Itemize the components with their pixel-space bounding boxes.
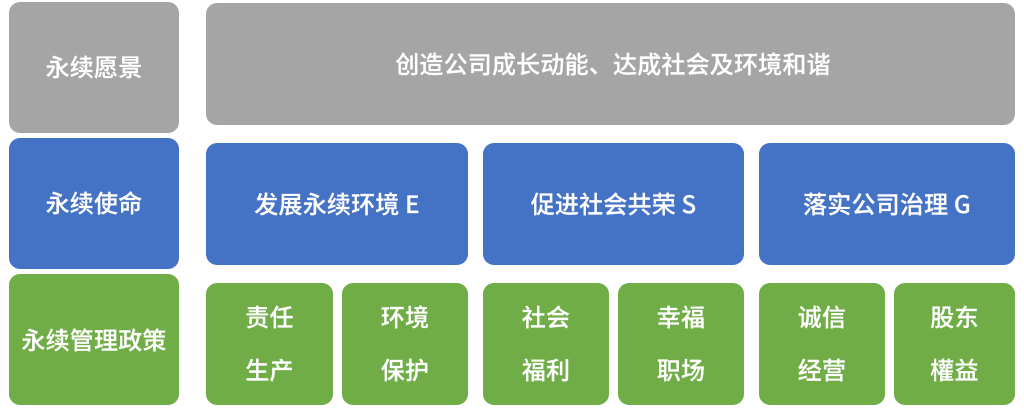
policy: social welfare xyxy=(483,283,609,405)
panel: mission G xyxy=(759,143,1015,265)
policy: integrity management: 诚信 xyxy=(798,298,846,333)
panel: mission G: 落实公司治理 G xyxy=(803,184,971,220)
panel: vision statement xyxy=(206,3,1015,125)
panel: mission E xyxy=(206,143,468,265)
label: sustainability vision xyxy=(9,2,179,133)
label: sustainability mission xyxy=(9,138,179,269)
policy: shareholder rights xyxy=(894,283,1015,405)
panel: mission S xyxy=(483,143,744,265)
panel: vision statement: 创造公司成长动能、达成社会及环境和谐 xyxy=(395,44,831,80)
policy: responsible production xyxy=(206,283,333,405)
policy: happy workplace: 幸福 xyxy=(657,298,705,333)
policy: shareholder rights: 權益 xyxy=(930,351,979,386)
label: sustainability mission: 永续使命 xyxy=(46,184,142,219)
label: sustainability management policy xyxy=(9,274,179,405)
policy: environmental protection xyxy=(342,283,468,405)
policy: environmental protection: 保护 xyxy=(381,351,429,386)
panel: mission S: 促进社会共荣 S xyxy=(531,184,696,220)
policy: integrity management xyxy=(759,283,885,405)
label: sustainability vision: 永续愿景 xyxy=(46,48,142,83)
policy: environmental protection: 环境 xyxy=(381,298,429,333)
policy: shareholder rights: 股东 xyxy=(930,298,979,333)
policy: happy workplace xyxy=(618,283,744,405)
label: sustainability management policy: 永续管理政策 xyxy=(21,320,167,356)
panel: mission E: 发展永续环境 E xyxy=(254,184,420,220)
policy: social welfare: 社会 xyxy=(522,298,570,333)
policy: responsible production: 责任 xyxy=(245,298,294,333)
policy: responsible production: 生产 xyxy=(245,351,294,386)
policy: happy workplace: 职场 xyxy=(657,351,705,386)
policy: social welfare: 福利 xyxy=(522,351,570,386)
policy: integrity management: 经营 xyxy=(798,351,846,386)
